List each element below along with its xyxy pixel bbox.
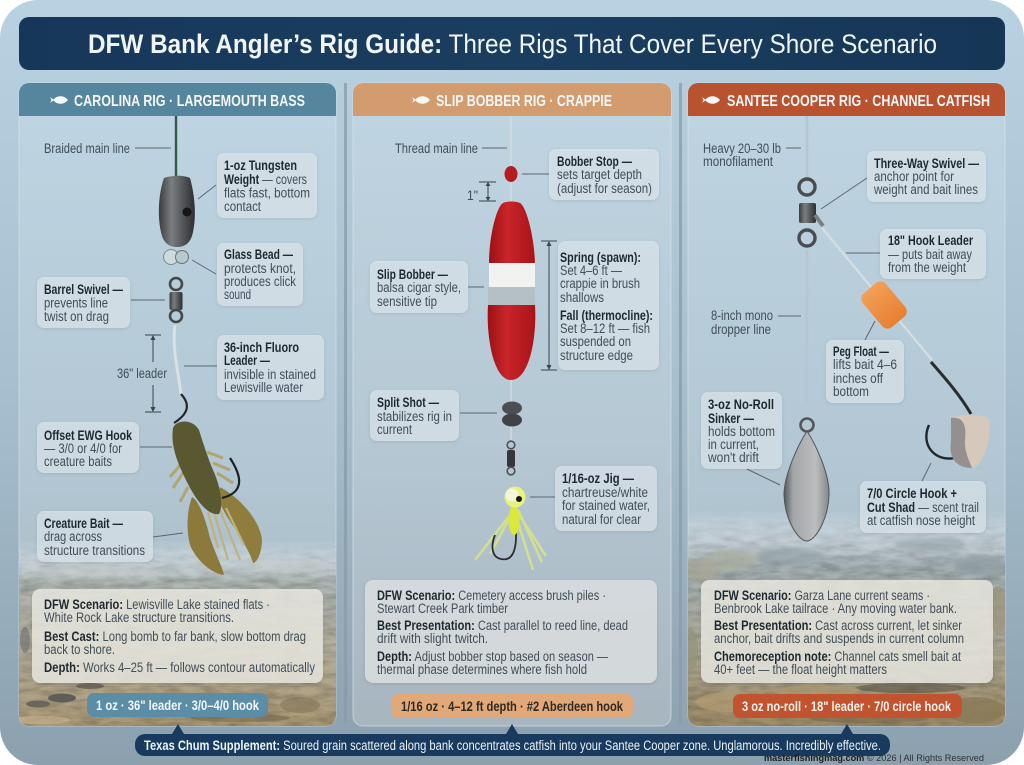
leader: hook leader xyxy=(846,252,880,254)
callout: no-roll sinker: Sinker — xyxy=(708,411,754,426)
info box: DFW scenario: Best Presentation: Cast across current, let sinker xyxy=(714,618,962,633)
callout: circle hook and cut shad: at catfish nose height xyxy=(867,513,975,528)
label: dropper line xyxy=(711,308,801,337)
callout: jig: natural for clear xyxy=(562,512,641,527)
title bar: DFW Bank Angler’s Rig Guide: Three Rigs That Cover Every Shore Scenario xyxy=(88,29,937,59)
callout: three-way swivel: weight and bait lines xyxy=(873,182,978,197)
icon: small swivel xyxy=(507,441,515,475)
callout: slip bobber: sensitive tip xyxy=(377,294,437,309)
info box: DFW scenario: Best Cast: Long bomb to far bank, slow bottom drag xyxy=(44,629,306,644)
callout: barrel swivel: Barrel Swivel — xyxy=(44,282,123,297)
callout: bobber stop: Bobber Stop — xyxy=(557,154,632,169)
callout: slip bobber: Slip Bobber — xyxy=(377,267,448,282)
leader: sinker xyxy=(747,469,780,485)
callout: no-roll sinker: 3-oz No-Roll xyxy=(708,397,774,412)
leader: bead xyxy=(192,260,216,274)
info box: DFW scenario: DFW Scenario: Garza Lane current seams · xyxy=(714,588,930,603)
panel: Carolina rig xyxy=(10,83,336,726)
header text with fish icon: CAROLINA RIG · LARGEMOUTH BASS xyxy=(74,93,305,110)
icon: chartreuse jig xyxy=(475,486,546,570)
callout: fluoro leader: Lewisville water xyxy=(224,380,303,395)
callout: hook leader: from the weight xyxy=(888,260,966,275)
leader: weight xyxy=(198,185,216,199)
callout: seasonal depth: structure edge xyxy=(560,348,633,363)
callout: tungsten weight: 1-oz Tungsten xyxy=(224,158,297,173)
callout: tungsten weight: flats fast, bottom xyxy=(224,186,310,200)
leader: peg float xyxy=(865,321,875,340)
panel header xyxy=(19,83,336,116)
info box: DFW scenario: DFW Scenario: Lewisville Lake stained flats · xyxy=(44,597,270,612)
callout: seasonal depth xyxy=(558,241,659,370)
callout: barrel swivel: prevents line xyxy=(44,296,108,310)
callout: no-roll sinker: in current, xyxy=(708,437,759,452)
callout: seasonal depth: Spring (spawn): xyxy=(560,250,641,265)
callout bar: Texas chum supplement: Texas Chum Supplement: Soured grain scattered along bank concentrates catfish into your Santee Cooper zone. Unglamorous. Incredibly effective. xyxy=(144,738,881,753)
callout: creature bait: structure transitions xyxy=(44,543,145,558)
callout: peg float: Peg Float — xyxy=(833,344,889,359)
callout: seasonal depth: suspended on xyxy=(560,334,631,349)
callout: jig: chartreuse/white xyxy=(562,485,648,500)
dimension: 1 inch xyxy=(467,182,496,203)
callout: jig: for stained water, xyxy=(562,498,650,513)
leader: fluoro xyxy=(184,365,217,367)
leader: swivel xyxy=(131,299,165,301)
callout: no-roll sinker: won't drift xyxy=(707,450,759,465)
info box: DFW scenario: anchor, bait drifts and suspends in current column xyxy=(714,631,964,646)
copyright footer: masterfishingmag.com © 2026 | All Rights Reserved xyxy=(764,753,984,764)
label: dropper line: dropper line xyxy=(711,322,771,337)
main line xyxy=(510,116,512,440)
callout: EWG hook: — 3/0 or 4/0 for xyxy=(44,441,122,456)
callout: bobber stop xyxy=(549,149,659,200)
callout: split shot: current xyxy=(377,422,412,437)
callout: fluoro leader: Leader — xyxy=(224,353,270,368)
label: heavy monofilament xyxy=(703,141,801,169)
icon: creature bait with hook xyxy=(170,394,262,575)
icon: hook and cut shad xyxy=(926,362,990,468)
callout: bobber stop: sets target depth xyxy=(557,167,642,182)
spec pill: 1 oz · 36" leader · 3/0–4/0 hook xyxy=(96,698,259,713)
leader: circle hook xyxy=(922,463,931,481)
leader: bait xyxy=(153,533,183,537)
callout: peg float xyxy=(826,340,904,403)
callout: tungsten weight: contact xyxy=(224,199,261,214)
fluoro leader line xyxy=(174,325,181,394)
callout: glass bead: produces click xyxy=(224,274,296,289)
leader: three-way swivel xyxy=(821,178,867,209)
callout: hook leader: 18" Hook Leader xyxy=(888,233,974,248)
callout: glass bead: protects knot, xyxy=(224,261,296,276)
header text with fish icon: SLIP BOBBER RIG · CRAPPIE xyxy=(436,93,612,110)
icon: slip bobber xyxy=(488,202,535,380)
icon: barrel swivel xyxy=(170,278,182,322)
callout: tungsten weight xyxy=(217,153,317,218)
callout: seasonal depth: shallows xyxy=(560,290,604,305)
info box: DFW scenario: Depth: Works 4–25 ft — follows contour automatically xyxy=(44,660,315,675)
info box: DFW scenario: back to shore. xyxy=(44,642,115,657)
spec pill: 3 oz no-roll · 18" leader · 7/0 circle hook xyxy=(742,699,951,714)
info box: DFW scenario xyxy=(32,589,323,683)
callout: peg float: inches off xyxy=(833,371,883,386)
callout: jig xyxy=(555,466,657,531)
panel: slip bobber rig xyxy=(353,83,671,726)
callout: three-way swivel: Three-Way Swivel — xyxy=(874,156,979,171)
callout: slip bobber xyxy=(370,261,468,313)
callout: hook leader xyxy=(880,229,986,279)
dimension: 1 inch: 1" xyxy=(467,188,478,203)
callout: fluoro leader xyxy=(217,335,324,400)
info box: DFW scenario: Benbrook Lake tailrace · Any moving water bank. xyxy=(714,601,957,616)
label: heavy monofilament: Heavy 20–30 lb xyxy=(703,141,781,156)
callout: glass bead xyxy=(217,243,303,306)
callout: slip bobber: balsa cigar style, xyxy=(377,280,461,295)
callout: glass bead: sound xyxy=(224,287,251,302)
divider right xyxy=(679,83,682,723)
callout: barrel swivel xyxy=(37,277,130,328)
callout: fluoro leader: invisible in stained xyxy=(224,367,316,382)
callout: creature bait: drag across xyxy=(44,529,102,544)
label: braided main line: Braided main line xyxy=(44,141,130,156)
icon: split shot xyxy=(502,402,522,426)
callout: EWG hook xyxy=(37,422,139,473)
panel: Santee Cooper rig xyxy=(682,83,1007,726)
info box: DFW scenario xyxy=(701,580,993,683)
info box: DFW scenario xyxy=(365,580,657,683)
callout: seasonal depth: Fall (thermocline): xyxy=(560,308,653,323)
leader: jig xyxy=(530,496,555,498)
callout bar: Texas chum supplement xyxy=(135,724,890,756)
dimension: 36 inch leader: 36" leader xyxy=(117,366,167,381)
dimension: depth range arrow xyxy=(541,241,557,370)
info box: DFW scenario: thermal phase determines where fish hold xyxy=(377,662,587,677)
leader: bobber xyxy=(468,286,484,288)
callout: fluoro leader: 36-inch Fluoro xyxy=(224,340,299,355)
callout: circle hook and cut shad: Cut Shad — scent trail xyxy=(867,500,979,515)
leader: hook xyxy=(140,446,172,448)
info box: DFW scenario: drift with slight twitch. xyxy=(377,631,488,646)
hook leader line xyxy=(822,228,932,360)
info box: DFW scenario: White Rock Lake structure transitions. xyxy=(44,610,234,625)
callout: no-roll sinker: holds bottom xyxy=(708,424,775,439)
main and dropper line xyxy=(806,116,808,405)
spec pill xyxy=(391,694,633,718)
callout: peg float: bottom xyxy=(833,384,869,399)
panel header xyxy=(688,83,1005,116)
callout: creature bait xyxy=(37,511,153,562)
title bar xyxy=(19,17,1005,70)
callout: barrel swivel: twist on drag xyxy=(44,309,109,324)
icon: peg float xyxy=(858,279,910,331)
callout: seasonal depth: crappie in brush xyxy=(560,276,640,291)
callout: circle hook and cut shad: 7/0 Circle Hook + xyxy=(867,486,957,501)
info box: DFW scenario: Depth: Adjust bobber stop based on season — xyxy=(377,649,608,664)
callout: jig: 1/16-oz Jig — xyxy=(562,471,634,486)
callout: peg float: lifts bait 4–6 xyxy=(833,357,897,372)
callout: split shot: Split Shot — xyxy=(377,395,439,410)
spec pill: 1/16 oz · 4–12 ft depth · #2 Aberdeen hook xyxy=(401,699,623,714)
lake bottom sand and rocks xyxy=(10,540,336,726)
lake bottom rocks xyxy=(682,510,1007,726)
main line xyxy=(175,116,177,180)
info box: DFW scenario: Best Presentation: Cast parallel to reed line, dead xyxy=(377,618,628,633)
label: dropper line: 8-inch mono xyxy=(711,308,773,323)
callout: tungsten weight: Weight — covers xyxy=(224,172,307,187)
callout: EWG hook: Offset EWG Hook xyxy=(44,428,132,443)
spec pill xyxy=(733,694,962,718)
info box: DFW scenario: Chemoreception note: Channel cats smell bait at xyxy=(714,649,961,664)
icon: bobber stop bead xyxy=(504,166,518,182)
callout: seasonal depth: Set 8–12 ft — fish xyxy=(560,321,650,336)
callout: seasonal depth: Set 4–6 ft — xyxy=(560,263,622,278)
info box: DFW scenario: 40+ feet — the float height matters xyxy=(714,662,887,677)
icon: glass beads xyxy=(164,250,188,264)
callout: creature bait: Creature Bait — xyxy=(44,516,123,531)
panel header xyxy=(353,83,671,116)
label: heavy monofilament: monofilament xyxy=(703,154,773,169)
callout: split shot xyxy=(370,390,459,441)
dimension: 36 inch leader xyxy=(117,335,167,412)
callout: three-way swivel: anchor point for xyxy=(874,169,954,184)
callout: no-roll sinker xyxy=(701,392,782,469)
leader: split shot xyxy=(460,412,497,414)
info box: DFW scenario: Stewart Creek Park timber xyxy=(377,601,508,616)
callout: circle hook and cut shad xyxy=(860,481,986,533)
label: thread main line: Thread main line xyxy=(395,141,478,156)
divider left xyxy=(344,83,347,723)
icon: three-way swivel xyxy=(799,179,823,246)
icon: no-roll sinker xyxy=(784,418,829,541)
callout: bobber stop: (adjust for season) xyxy=(557,181,652,196)
icon: tungsten barrel weight xyxy=(159,176,195,247)
callout: hook leader: — puts bait away xyxy=(888,247,972,262)
callout: EWG hook: creature baits xyxy=(44,454,112,469)
callout: glass bead: Glass Bead — xyxy=(224,247,293,262)
spec pill xyxy=(87,693,268,717)
callout: split shot: stabilizes rig in xyxy=(377,409,452,424)
info box: DFW scenario: DFW Scenario: Cemetery access brush piles · xyxy=(377,588,606,603)
leader: stop xyxy=(522,173,549,175)
callout: three-way swivel xyxy=(867,151,986,202)
